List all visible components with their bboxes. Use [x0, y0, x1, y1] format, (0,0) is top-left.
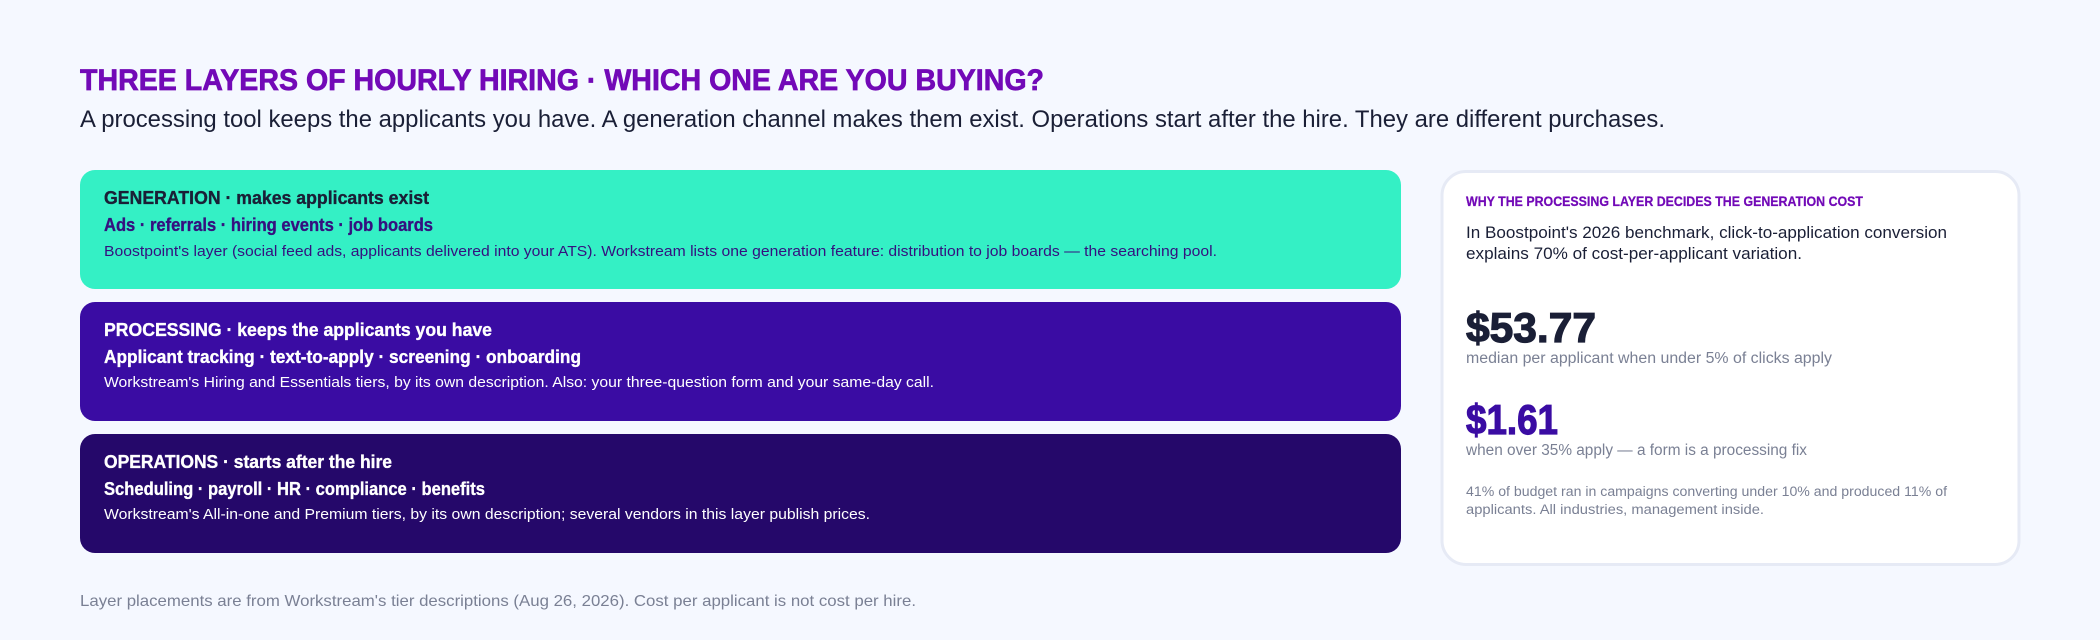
stat: median cost: $53.77 [1466, 304, 1596, 351]
panel: why processing decides generation cost [1442, 172, 2019, 564]
benchmark text: explains 70% of cost-per-applicant variation. [1466, 245, 1802, 263]
generation examples: Ads · referrals · hiring events · job boards [104, 215, 433, 235]
operations examples: Scheduling · payroll · HR · compliance · benefits [104, 479, 485, 499]
operations description: Workstream's All-in-one and Premium tiers, by its own description; several vendors in this layer publish prices. [104, 506, 870, 523]
generation heading: GENERATION · makes applicants exist [104, 188, 429, 208]
stat: high conversion cost [1465, 396, 1807, 459]
stat: high conversion cost: when over 35% apply — a form is a processing fix [1465, 442, 1807, 459]
stat: high conversion cost: $1.61 [1466, 396, 1558, 443]
processing examples: Applicant tracking · text-to-apply · screening · onboarding [104, 347, 581, 367]
operations heading: OPERATIONS · starts after the hire [104, 452, 392, 472]
footnote: Layer placements are from Workstream's tier descriptions (Aug 26, 2026). Cost per applicant is not cost per hire. [80, 593, 916, 610]
panel heading: WHY THE PROCESSING LAYER DECIDES THE GENERATION COST [1466, 194, 1864, 209]
budget note [1466, 484, 1947, 517]
generation description: Boostpoint's layer (social feed ads, applicants delivered into your ATS). Workstream lists one generation feature: distribution to job boards — the searching pool. [104, 243, 1217, 260]
panel: processing layer [80, 302, 1401, 421]
budget note: applicants. All industries, management inside. [1466, 502, 1764, 517]
subtitle: A processing tool keeps the applicants you have. A generation channel makes them exist. Operations start after the hire. They are different purchases. [80, 106, 1665, 133]
stat: median cost [1466, 304, 1832, 367]
title: THREE LAYERS OF HOURLY HIRING · WHICH ONE ARE YOU BUYING? [80, 64, 1044, 97]
processing heading: PROCESSING · keeps the applicants you have [104, 320, 492, 340]
panel: operations layer [80, 434, 1401, 553]
benchmark text [1466, 224, 1947, 263]
processing description: Workstream's Hiring and Essentials tiers, by its own description. Also: your three-question form and your same-day call. [104, 374, 934, 391]
budget note: 41% of budget ran in campaigns converting under 10% and produced 11% of [1466, 484, 1947, 499]
panel: generation layer [80, 170, 1401, 289]
stat: median cost: median per applicant when under 5% of clicks apply [1466, 350, 1832, 367]
benchmark text: In Boostpoint's 2026 benchmark, click-to-application conversion [1466, 224, 1947, 242]
